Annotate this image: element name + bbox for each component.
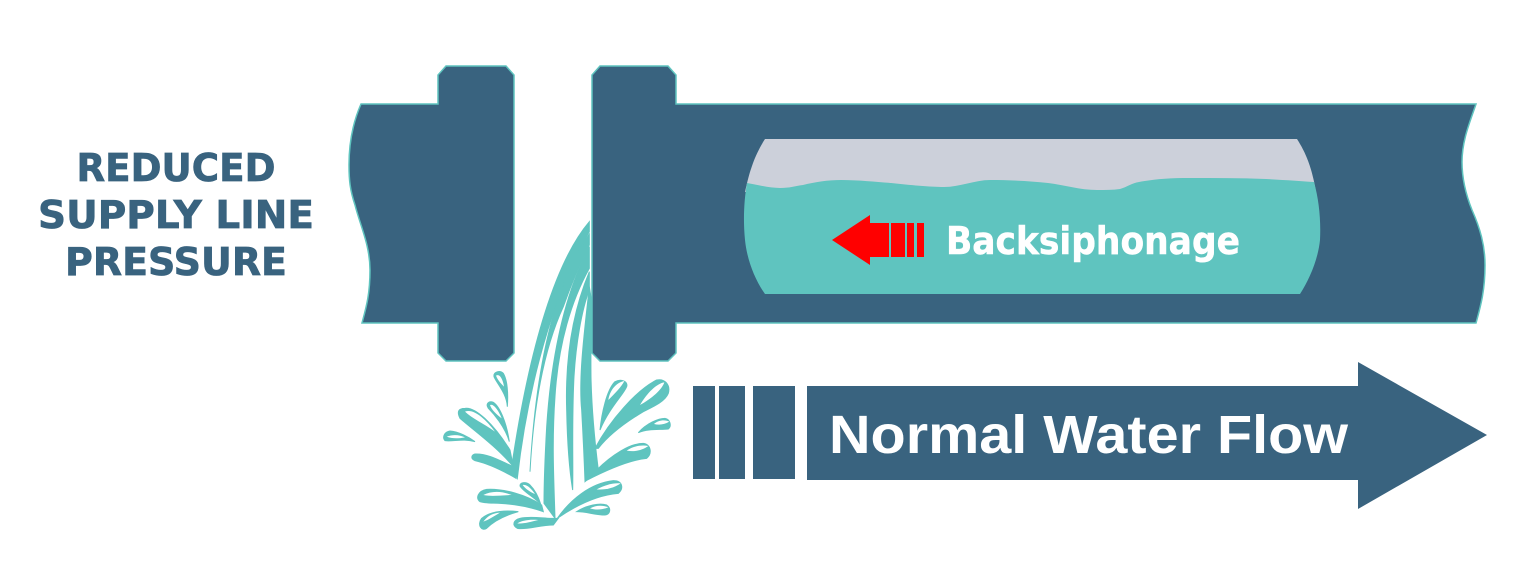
left label: reduced supply line pressure: REDUCED — [76, 146, 276, 190]
lower splashes — [478, 489, 543, 512]
splash highlights — [447, 375, 669, 523]
left label: reduced supply line pressure — [38, 146, 314, 284]
right pipe section — [592, 66, 1485, 361]
left label: reduced supply line pressure: SUPPLY LINE — [38, 193, 314, 237]
right splashes — [595, 380, 669, 448]
air space in pipe — [745, 139, 1316, 192]
normal water flow arrow — [693, 362, 1487, 509]
water body — [744, 178, 1320, 294]
normal water flow label: Normal Water Flow — [829, 405, 1349, 465]
left splashes — [458, 408, 513, 467]
left label: reduced supply line pressure: PRESSURE — [65, 240, 287, 284]
pipe cutaway window with water — [744, 139, 1320, 294]
left broken pipe section — [349, 66, 514, 361]
red backsiphonage arrow — [832, 215, 924, 265]
arrow body and head — [807, 362, 1487, 509]
backsiphonage label: Backsiphonage — [946, 219, 1240, 263]
falling water streams — [512, 222, 589, 478]
arrow tail bars — [693, 386, 795, 479]
water leak splash — [444, 222, 670, 529]
